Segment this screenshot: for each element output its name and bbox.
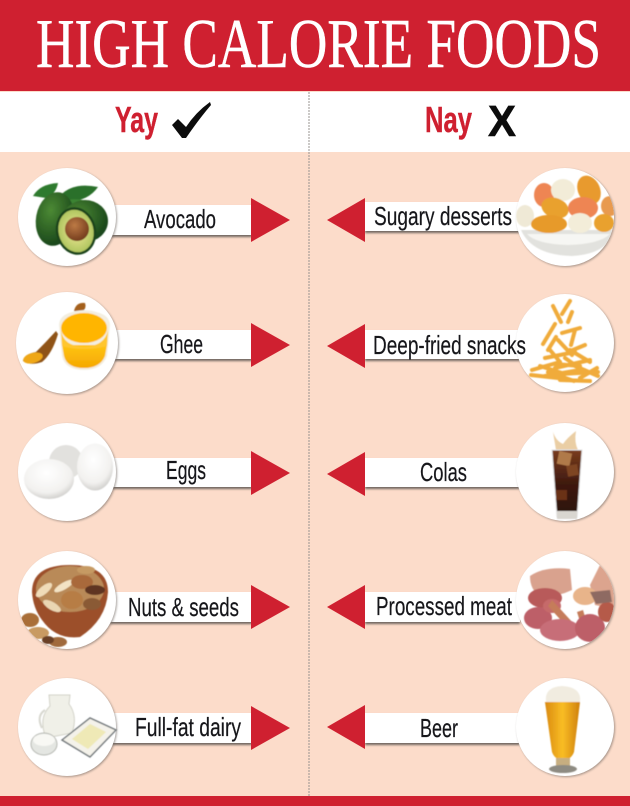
row: Processed meat: [327, 551, 620, 650]
bottom bar: [0, 796, 630, 806]
row: Eggs: [18, 423, 290, 522]
title banner: [0, 0, 630, 91]
label: Colas: Colas: [420, 457, 467, 487]
arrow: Nuts and seeds: [110, 585, 290, 629]
arrow: Full-fat dairy: [110, 706, 290, 750]
icon: check mark: [172, 102, 211, 138]
row: Deep-fried snacks: [327, 294, 615, 393]
row: Beer: [327, 678, 615, 777]
column header band: [0, 92, 630, 152]
label: Eggs: Eggs: [166, 455, 206, 485]
label: Full-fat dairy: Full-fat dairy: [135, 712, 241, 742]
arrow: Eggs: [110, 451, 290, 495]
arrow: Colas: [327, 452, 520, 496]
arrow: Deep-fried snacks: [327, 324, 520, 368]
icon: dairy products: [18, 678, 117, 777]
icon: processed meat: [516, 551, 620, 650]
arrow: Avocado: [110, 198, 290, 242]
row: Nuts and seeds: [18, 551, 290, 650]
row: Colas: [327, 423, 615, 522]
label: Beer: Beer: [420, 713, 458, 743]
icon: X mark: X: [488, 97, 516, 146]
heading: Yay: Yay: [115, 99, 158, 140]
icon: eggs: [18, 423, 117, 522]
label: Deep-fried snacks: Deep-fried snacks: [373, 330, 526, 360]
arrow: Sugary desserts: [327, 198, 520, 242]
icon: ghee jar and spoon: [16, 292, 119, 395]
label: Ghee: Ghee: [160, 329, 203, 359]
row: Sugary desserts: [327, 168, 619, 267]
arrow: Beer: [327, 705, 520, 749]
icon: glass of beer: [516, 678, 615, 777]
icon: french fries: [516, 294, 615, 393]
icon: sweets in a bowl: [516, 168, 619, 267]
icon: glass of cola: [516, 423, 615, 522]
row: Ghee: [16, 292, 290, 395]
label: Nuts and seeds: Nuts & seeds: [128, 592, 239, 622]
label: Processed meat: Processed meat: [376, 591, 513, 621]
row: Full-fat dairy: [18, 678, 290, 777]
arrow: Processed meat: [327, 585, 520, 629]
icon: avocado: [18, 168, 117, 267]
label: Avocado: Avocado: [144, 204, 216, 234]
row: Avocado: [18, 168, 290, 267]
icon: bowl of nuts: [18, 551, 117, 650]
label: Sugary desserts: Sugary desserts: [374, 201, 512, 231]
heading: Nay: Nay: [425, 99, 472, 140]
arrow: Ghee: [110, 323, 290, 367]
